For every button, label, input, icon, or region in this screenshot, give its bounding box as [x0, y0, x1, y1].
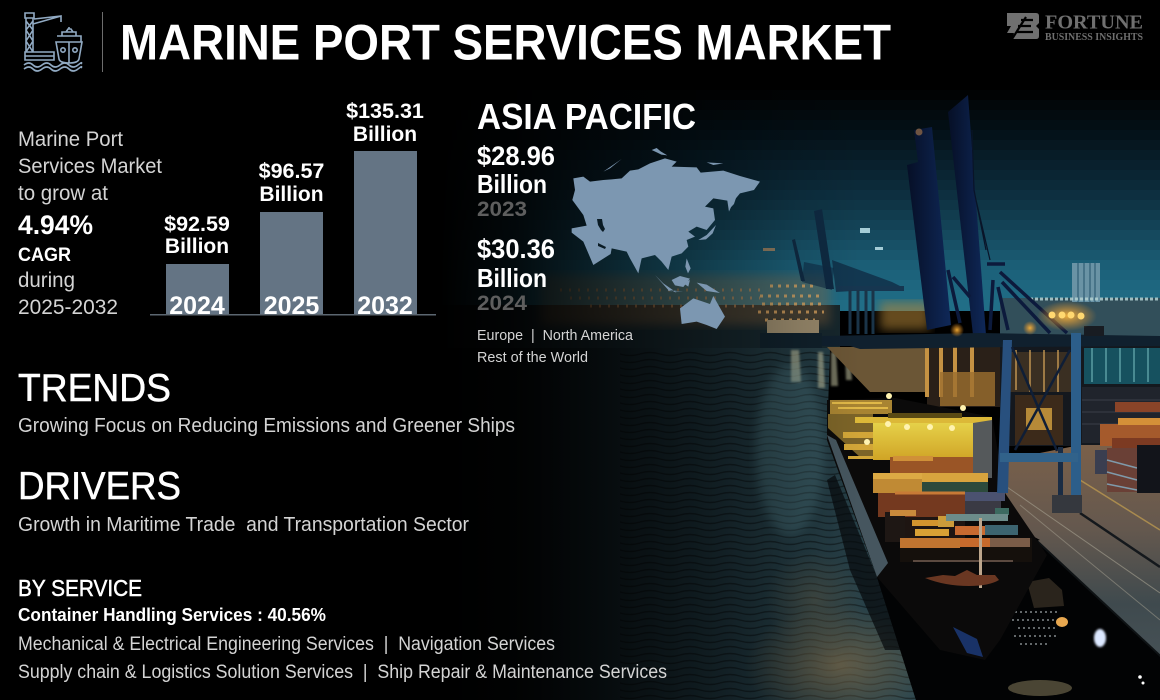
main gantry crane [822, 95, 1160, 513]
header [24, 12, 891, 72]
CAGR text block: 2025-2032 [18, 296, 118, 319]
icon: crane and ship [24, 13, 82, 71]
region block: Asia Pacific: Rest of the World [477, 349, 588, 366]
region block: Asia Pacific: $28.96 [477, 141, 555, 171]
water [440, 348, 916, 700]
hull side [827, 435, 888, 577]
distant horizon water [1000, 298, 1160, 338]
region block: Asia Pacific [477, 96, 696, 366]
logo: Fortune Business Insights: BUSINESS INSIGHTS [1045, 31, 1143, 43]
crane stays [948, 264, 1067, 333]
crane legs [997, 340, 1012, 493]
bar 2025 [259, 159, 324, 320]
trends: TRENDS [18, 367, 171, 410]
distant city haze and lights [440, 228, 930, 350]
by service: Supply chain & Logistics Solution Services | Ship Repair & Maintenance Services [18, 662, 667, 683]
crane booms [907, 127, 951, 330]
axis line [150, 314, 436, 316]
bar 2024: Billion [165, 235, 229, 258]
region block: Asia Pacific: ASIA PACIFIC [477, 96, 696, 137]
region block: Asia Pacific: $30.36 [477, 234, 555, 264]
stern deck cargo [828, 400, 892, 459]
by service: Mechanical & Electrical Engineering Services | Navigation Services [18, 634, 555, 655]
bar 2032: Billion [353, 123, 417, 146]
crane deck [822, 333, 1160, 349]
bar chart: market size [150, 99, 436, 320]
hull shadow [827, 475, 905, 650]
bar 2024 [164, 212, 230, 320]
bridge lights [864, 393, 966, 445]
photo: night-time container port [440, 90, 1160, 700]
drivers [18, 465, 469, 536]
fade to black at left of photo [440, 90, 860, 700]
moored vessel in distance [760, 320, 822, 350]
trends: Growing Focus on Reducing Emissions and Greener Ships [18, 415, 515, 437]
crane flood lights [916, 128, 1097, 337]
bar 2025: $96.57 [259, 159, 324, 183]
map lakes [597, 219, 606, 249]
CAGR text block [18, 128, 162, 319]
stacked containers [873, 456, 1032, 588]
drivers: DRIVERS [18, 465, 181, 508]
container ship [827, 393, 1047, 660]
region block: Asia Pacific: Billion [477, 263, 547, 293]
quay rail lines [1007, 480, 1160, 657]
sky [440, 90, 1160, 311]
bar 2025: Billion [259, 183, 324, 206]
far shoreline lights [1030, 298, 1160, 300]
CAGR text block: to grow at [18, 182, 108, 205]
sparkling reflections [1008, 578, 1144, 696]
by service: BY SERVICE [18, 575, 142, 601]
CAGR text block: during [18, 269, 75, 292]
skyline tower [1072, 263, 1100, 302]
region block: Asia Pacific: 2024 [477, 292, 527, 315]
by service: Container Handling Services : 40.56% [18, 605, 326, 625]
dark water and wall at lower right [877, 533, 1160, 700]
bar 2032: 2032 [357, 292, 413, 320]
quay [1005, 445, 1160, 657]
bar 2024: $92.59 [164, 212, 230, 236]
water ripples [620, 350, 916, 700]
CAGR text block: Marine Port [18, 128, 123, 151]
bar 2032 [346, 99, 424, 320]
trends [18, 367, 515, 437]
terminal ground under crane [827, 346, 1160, 446]
CAGR text block: 4.94% [18, 210, 93, 240]
region block: Asia Pacific: Europe | North America [477, 327, 634, 344]
bow highlight [953, 627, 983, 657]
bar 2024: 2024 [169, 292, 225, 320]
crane bogie [1052, 495, 1082, 513]
map: Asia Pacific [572, 148, 760, 329]
distant cranes [792, 209, 904, 334]
by service [18, 575, 667, 683]
region block: Asia Pacific: 2023 [477, 198, 527, 221]
bow deck cargo [925, 570, 999, 586]
bar 2032: $135.31 [346, 99, 424, 123]
CAGR text block: Services Market [18, 155, 162, 178]
logo: Fortune Business Insights [1007, 12, 1143, 43]
logo mark [1007, 13, 1039, 39]
bridge superstructure [873, 422, 973, 460]
title: MARINE PORT SERVICES MARKET [120, 14, 891, 70]
water light reflections [745, 350, 935, 700]
ship silhouette [827, 398, 1047, 660]
CAGR text block: CAGR [18, 244, 71, 266]
header divider [102, 12, 103, 72]
bar 2025: 2025 [264, 292, 319, 320]
drivers: Growth in Maritime Trade and Transportation Sector [18, 514, 469, 536]
region block: Asia Pacific: Billion [477, 169, 547, 199]
dockside container stacks [1082, 387, 1160, 493]
logo: Fortune Business Insights: FORTUNE [1045, 12, 1143, 34]
